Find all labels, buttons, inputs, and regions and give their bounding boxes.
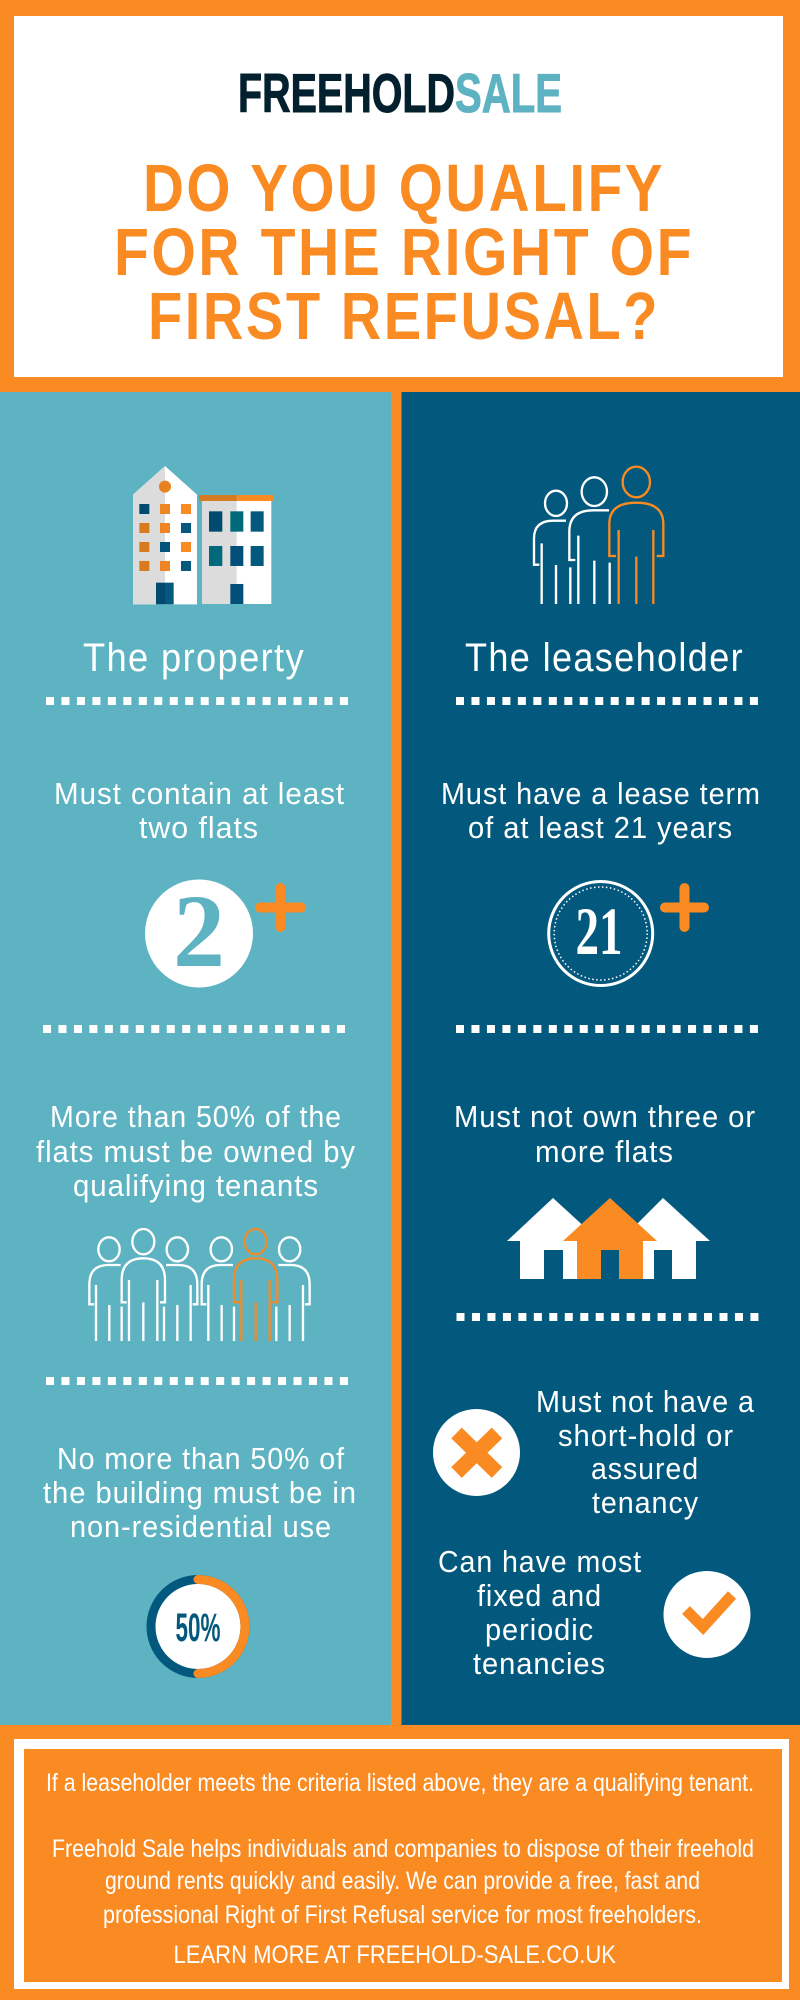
icon: three people bbox=[534, 467, 663, 604]
heading: the property: The property bbox=[83, 636, 305, 680]
text: three or more flats: Must not own three or bbox=[454, 1099, 756, 1134]
text: 50% owned: flats must be owned by bbox=[36, 1134, 356, 1169]
text: periodic tenancies bbox=[438, 1544, 642, 1681]
text: 50% owned: More than 50% of the bbox=[50, 1099, 342, 1134]
text: non-residential: non-residential use bbox=[70, 1509, 332, 1544]
text: periodic tenancies: fixed and bbox=[477, 1578, 602, 1613]
text: periodic tenancies: Can have most bbox=[438, 1544, 642, 1579]
icon: three houses bbox=[507, 1198, 710, 1279]
title: FIRST REFUSAL? bbox=[148, 279, 660, 354]
title: DO YOU QUALIFY bbox=[143, 151, 665, 226]
text: short-hold tenancy: short-hold or bbox=[558, 1418, 734, 1453]
icon: six people bbox=[89, 1229, 310, 1341]
text: service description: professional Right of First Refusal service for most freeholders. bbox=[103, 1901, 702, 1929]
text: short-hold tenancy bbox=[536, 1384, 755, 1520]
text: three or more flats bbox=[454, 1099, 756, 1169]
text: two flats: Must contain at least bbox=[54, 776, 345, 811]
icon: 21 plus bbox=[549, 882, 704, 986]
logo: SALE bbox=[455, 62, 562, 124]
text: two flats: two flats bbox=[139, 810, 259, 845]
icon: buildings bbox=[133, 466, 274, 604]
text: lease term bbox=[441, 776, 761, 845]
text: non-residential bbox=[43, 1441, 357, 1544]
text: short-hold tenancy: Must not have a bbox=[536, 1384, 755, 1419]
text: three or more flats: more flats bbox=[535, 1134, 674, 1169]
chart: 50% donut: 50% bbox=[176, 1606, 220, 1650]
panel: the leaseholder bbox=[402, 392, 800, 1725]
text: short-hold tenancy: tenancy bbox=[592, 1485, 699, 1520]
icon: cross bbox=[433, 1409, 520, 1496]
text: service description bbox=[52, 1835, 754, 1929]
text: service description: ground rents quickly and easily. We can provide a free, fast and bbox=[105, 1867, 700, 1895]
text: periodic tenancies: periodic bbox=[485, 1612, 594, 1647]
text: call to action: LEARN MORE AT FREEHOLD-SALE.CO.UK bbox=[174, 1941, 616, 1969]
text: non-residential: No more than 50% of bbox=[57, 1441, 345, 1476]
text: two flats bbox=[54, 776, 345, 845]
text: non-residential: the building must be in bbox=[43, 1475, 357, 1510]
icon: 2 plus: 2 bbox=[173, 874, 225, 989]
title bbox=[114, 151, 694, 354]
text: short-hold tenancy: assured bbox=[591, 1451, 699, 1486]
icon: 2 plus bbox=[145, 874, 301, 989]
text: periodic tenancies: tenancies bbox=[473, 1646, 606, 1681]
text: lease term: of at least 21 years bbox=[468, 810, 733, 845]
panel: header bbox=[14, 16, 783, 377]
chart: 50% donut bbox=[151, 1580, 245, 1674]
panel: footer bbox=[14, 1739, 789, 1989]
icon: 21 plus: 21 bbox=[576, 893, 622, 969]
text: 50% owned bbox=[36, 1099, 356, 1203]
text: lease term: Must have a lease term bbox=[441, 776, 761, 811]
icon: check bbox=[664, 1571, 750, 1658]
panel: the property bbox=[0, 392, 391, 1725]
logo: FREEHOLD bbox=[238, 62, 455, 124]
text: 50% owned: qualifying tenants bbox=[73, 1168, 319, 1203]
title: FOR THE RIGHT OF bbox=[114, 215, 694, 290]
heading: the leaseholder: The leaseholder bbox=[465, 636, 744, 680]
